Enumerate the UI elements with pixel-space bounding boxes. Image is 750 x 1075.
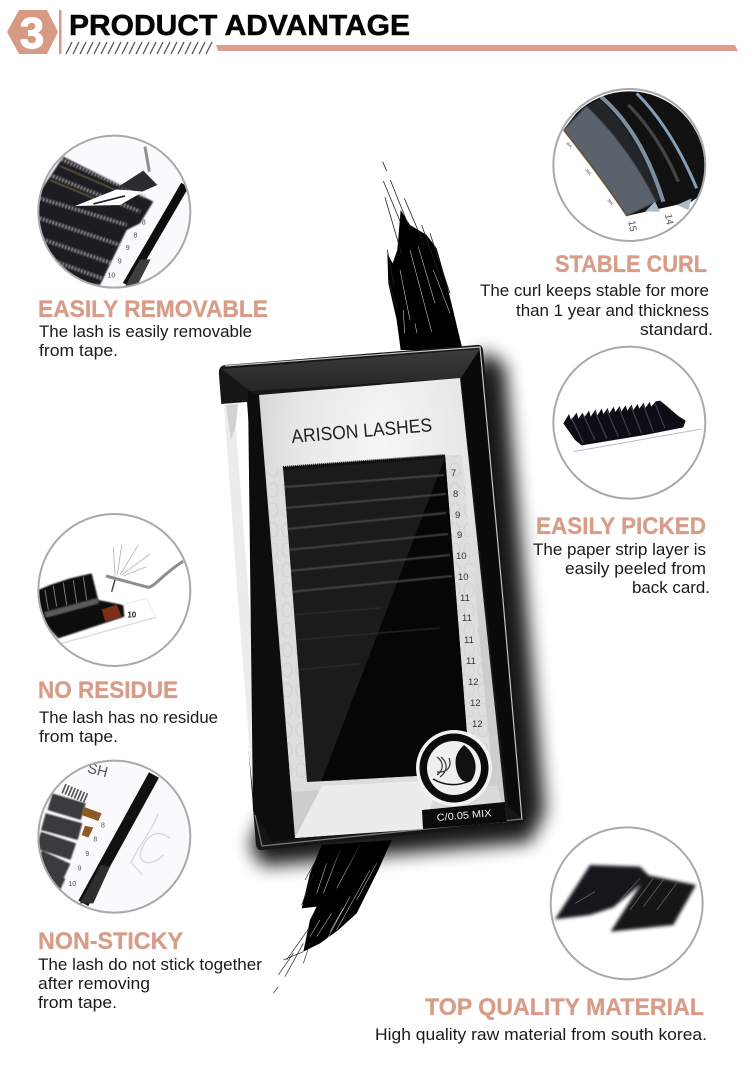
photo: lash curl close-up: 3ML xyxy=(606,197,616,207)
lash sheet pattern strips xyxy=(267,467,307,790)
length numbers: 8 xyxy=(453,489,458,500)
length numbers: 12 xyxy=(468,677,479,688)
length numbers: 12 xyxy=(472,719,483,730)
description: after removing xyxy=(38,974,150,993)
clear plastic side strip xyxy=(221,402,275,812)
length numbers: 9 xyxy=(457,530,462,541)
photo: tweezers removing lash: 9 xyxy=(126,243,130,252)
panel: no residue xyxy=(38,514,218,746)
photo: lash curl close-up xyxy=(553,88,705,241)
photo: lash curl close-up: 3ML xyxy=(565,140,575,150)
description: easily peeled from xyxy=(565,559,706,578)
heading: EASILY REMOVABLE xyxy=(38,296,268,323)
icon: hexagon number badge xyxy=(7,9,58,58)
description: back card. xyxy=(632,578,710,597)
photo: tweezers removing lash: 10 xyxy=(107,271,115,280)
panel: non-sticky xyxy=(37,761,262,1012)
description: The lash has no residue xyxy=(39,708,218,727)
panel: stable curl xyxy=(480,88,713,339)
photo: separated lashes: 9 xyxy=(78,865,82,872)
photo: lash curl close-up: 3ML xyxy=(584,167,594,177)
accent bar xyxy=(216,45,738,51)
photo: separated lashes xyxy=(37,761,190,913)
description: High quality raw material from south korea. xyxy=(375,1025,707,1044)
description xyxy=(39,322,252,360)
photo: separated lashes: 9 xyxy=(85,851,89,858)
photo: lash curl close-up: 14 xyxy=(662,213,675,226)
heading: NO RESIDUE xyxy=(38,677,178,704)
description xyxy=(38,955,262,1012)
description: The lash is easily removable xyxy=(39,322,252,341)
length numbers: 11 xyxy=(466,656,476,667)
photo: separated lashes: SH xyxy=(86,761,109,781)
photo: lash fibre close-up xyxy=(551,827,703,979)
glare on lower card xyxy=(295,786,507,838)
photo: lash fan on tweezers: 10 xyxy=(127,610,137,619)
photo: tweezers removing lash: 8 xyxy=(133,230,137,239)
icon: hexagon number badge: 3 xyxy=(20,9,44,58)
length numbers: 12 xyxy=(470,698,481,709)
heading: EASILY PICKED xyxy=(536,513,706,540)
length numbers: 11 xyxy=(462,613,472,624)
length numbers: 10 xyxy=(458,572,469,583)
description: from tape. xyxy=(38,993,117,1012)
panel: easily removable xyxy=(37,136,268,360)
description: from tape. xyxy=(39,727,118,746)
panel: easily picked xyxy=(533,347,710,597)
curl label xyxy=(422,802,507,829)
heading: STABLE CURL xyxy=(555,251,707,278)
lash block xyxy=(283,455,470,782)
length numbers: 10 xyxy=(456,551,467,562)
brush stroke top xyxy=(383,162,463,350)
photo: lash fan on tweezers xyxy=(38,514,190,666)
heading: NON-STICKY xyxy=(38,928,183,955)
curl label: C/0.05 MIX xyxy=(436,808,492,824)
description: The lash do not stick together xyxy=(38,955,262,974)
section header xyxy=(7,9,738,58)
brush stroke bottom xyxy=(273,840,392,993)
hatch decoration xyxy=(66,42,212,54)
description: standard. xyxy=(640,320,713,339)
tray frame xyxy=(219,345,525,850)
description: The curl keeps stable for more xyxy=(480,281,709,300)
paper card xyxy=(259,378,507,838)
photo: separated lashes: 10 xyxy=(68,881,76,888)
inner black column xyxy=(248,391,295,842)
length numbers: 9 xyxy=(455,510,460,521)
photo: tweezers removing lash: 9 xyxy=(118,256,122,265)
length numbers: 11 xyxy=(464,635,474,646)
description xyxy=(480,281,713,339)
description xyxy=(39,708,218,746)
photo: lash strip peeled xyxy=(553,347,705,499)
description xyxy=(533,540,710,597)
description: The paper strip layer is xyxy=(533,540,706,559)
product: lash tray xyxy=(219,345,545,866)
brand text: ARISON LASHES xyxy=(291,415,433,448)
length numbers: 7 xyxy=(451,468,456,479)
tray shadow xyxy=(250,350,545,866)
heading: TOP QUALITY MATERIAL xyxy=(425,994,704,1021)
length numbers: 11 xyxy=(460,593,470,604)
photo: separated lashes: 8 xyxy=(101,822,105,829)
panel: top quality material xyxy=(375,827,707,1044)
photo: lash curl close-up: 15 xyxy=(625,220,638,233)
photo: tweezers removing lash xyxy=(37,136,190,288)
feather logo xyxy=(416,730,492,806)
length numbers xyxy=(451,468,483,730)
description: than 1 year and thickness xyxy=(516,301,709,320)
title: PRODUCT ADVANTAGE xyxy=(69,10,410,42)
photo: tweezers removing lash: 8 xyxy=(142,217,146,226)
photo: separated lashes: 8 xyxy=(93,836,97,843)
description: from tape. xyxy=(39,341,118,360)
